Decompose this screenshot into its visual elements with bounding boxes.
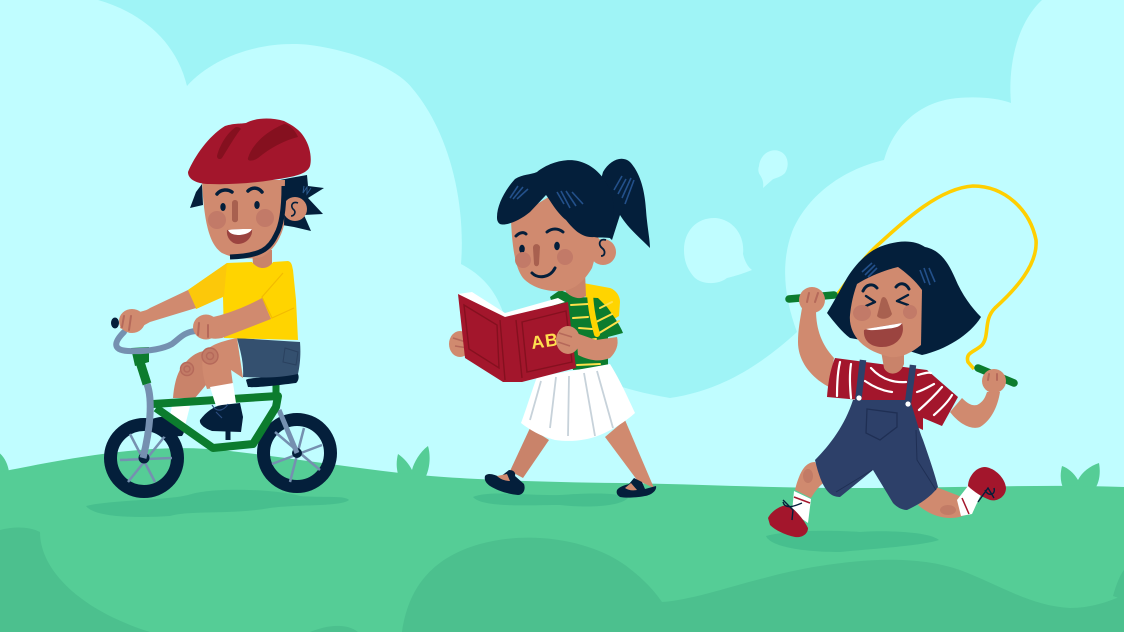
sleeve crease bbox=[262, 273, 294, 318]
shoe lace bbox=[212, 404, 228, 418]
eyes bbox=[519, 242, 560, 253]
shadow: jumper bbox=[766, 531, 939, 552]
book title: ABC bbox=[530, 327, 574, 353]
straps bbox=[858, 360, 913, 403]
sock stripes bbox=[794, 497, 810, 503]
hair highlights bbox=[510, 176, 634, 208]
front sock stripe bbox=[962, 498, 969, 514]
bike hubs bbox=[138, 448, 302, 464]
teeth bbox=[866, 323, 902, 330]
cheeks bbox=[208, 209, 274, 229]
brows bbox=[863, 284, 909, 291]
overalls bbox=[815, 400, 938, 510]
nose bbox=[877, 297, 892, 319]
cloud: tiny puff bbox=[758, 150, 788, 188]
back foot bbox=[150, 406, 190, 437]
backpack bbox=[583, 283, 620, 330]
face bbox=[850, 267, 922, 357]
book pages bbox=[458, 292, 565, 320]
hair bbox=[827, 241, 981, 355]
back fingers bbox=[122, 316, 131, 330]
hill corner bbox=[1113, 570, 1124, 600]
front leg bbox=[605, 420, 654, 488]
shirt bbox=[550, 290, 623, 370]
grips bbox=[111, 318, 225, 337]
cloud: large right bbox=[670, 0, 1124, 520]
ear detail bbox=[291, 202, 298, 216]
mouth bbox=[227, 229, 252, 244]
knee swirl bbox=[180, 362, 194, 376]
left shoe opening bbox=[497, 474, 510, 481]
front shoe bbox=[968, 467, 1006, 500]
front hand bbox=[193, 314, 219, 340]
neck bbox=[252, 250, 272, 269]
front leg bbox=[918, 487, 965, 518]
face bbox=[202, 180, 285, 258]
back leg bbox=[510, 428, 549, 478]
textured sleeve bbox=[188, 263, 227, 309]
pocket bbox=[866, 409, 897, 440]
shadow: bike bbox=[86, 490, 349, 517]
front sock bbox=[210, 383, 236, 406]
bike spokes bbox=[120, 428, 322, 482]
ear bbox=[590, 239, 616, 265]
book cover bbox=[458, 294, 576, 382]
right fingers bbox=[558, 333, 572, 346]
right hand bbox=[982, 369, 1006, 393]
character: child skipping bbox=[768, 186, 1036, 537]
brows bbox=[516, 229, 563, 236]
nose bbox=[232, 200, 238, 222]
teeth bbox=[228, 229, 252, 235]
face bbox=[511, 190, 600, 291]
front laces bbox=[978, 488, 994, 502]
shorts pocket bbox=[283, 348, 298, 365]
front leg thigh bbox=[202, 338, 243, 389]
scrape bbox=[940, 505, 956, 515]
knee swirl front bbox=[202, 348, 218, 364]
left shoe bbox=[485, 470, 525, 495]
brows bbox=[217, 188, 262, 194]
t-shirt stripes bbox=[837, 362, 952, 415]
ear detail bbox=[600, 240, 606, 256]
back arm bbox=[120, 290, 196, 333]
skirt bbox=[521, 364, 635, 441]
backpack strap bbox=[590, 289, 597, 334]
rear fork bbox=[279, 410, 297, 453]
smile bbox=[532, 268, 555, 277]
seat bbox=[246, 372, 299, 387]
cheeks bbox=[853, 305, 917, 321]
back hand bbox=[119, 309, 145, 333]
grass tufts bbox=[0, 446, 1100, 490]
hair highlight bbox=[303, 186, 311, 194]
helmet vents bbox=[217, 124, 298, 161]
right arm bbox=[950, 392, 1000, 428]
hair bbox=[190, 175, 324, 231]
left fingers bbox=[807, 293, 818, 302]
shadow: reader bbox=[473, 493, 628, 507]
t-shirt bbox=[827, 358, 958, 430]
ground bbox=[0, 446, 1124, 632]
mouth bbox=[864, 323, 903, 347]
seat post bbox=[272, 380, 280, 400]
right arm bbox=[576, 333, 618, 360]
front sock bbox=[957, 486, 982, 516]
stem bbox=[131, 347, 149, 366]
helmet bbox=[188, 119, 311, 184]
buttons bbox=[856, 395, 911, 407]
back leg bbox=[173, 351, 222, 398]
fork bbox=[143, 384, 150, 458]
cheeks bbox=[515, 249, 573, 268]
shorts bbox=[237, 338, 300, 378]
left rope handle bbox=[789, 295, 834, 299]
right shoe bbox=[617, 478, 656, 498]
cloud: large left bbox=[0, 0, 720, 520]
skirt pleats bbox=[530, 371, 613, 436]
eyes bbox=[220, 201, 260, 211]
left hand bbox=[449, 331, 471, 357]
bike wheels bbox=[110, 420, 330, 492]
left fingers bbox=[453, 338, 468, 348]
left hand bbox=[799, 287, 825, 313]
character: boy on bike bbox=[110, 119, 330, 491]
ponytail bbox=[590, 159, 650, 248]
character: girl reading bbox=[449, 159, 656, 498]
shirt bbox=[188, 261, 298, 340]
ear bbox=[283, 197, 307, 221]
back laces bbox=[783, 500, 802, 520]
hair highlights bbox=[862, 263, 935, 285]
pedal bbox=[226, 430, 230, 440]
overalls seams bbox=[836, 430, 936, 492]
ground shadows bbox=[86, 490, 939, 552]
front shoe bbox=[200, 403, 243, 432]
bike frame bbox=[153, 396, 278, 448]
cloud: small puff bbox=[684, 218, 752, 283]
front fingers bbox=[198, 323, 208, 337]
neck bbox=[880, 345, 904, 374]
right rope handle bbox=[978, 368, 1014, 383]
back leg bbox=[795, 462, 825, 498]
squeezed eyes bbox=[866, 295, 908, 306]
neck bbox=[560, 272, 586, 298]
knee mark bbox=[803, 469, 813, 483]
back sock bbox=[792, 491, 811, 523]
shirt stripes bbox=[571, 302, 619, 365]
back shoe bbox=[768, 505, 808, 537]
grass field bbox=[0, 448, 1124, 632]
nose bbox=[533, 244, 540, 266]
skipping rope bbox=[836, 186, 1036, 369]
handlebar bbox=[116, 331, 196, 351]
right fingers bbox=[988, 374, 997, 380]
darker hills bbox=[0, 528, 1124, 632]
right shoe opening bbox=[625, 483, 637, 490]
helmet strap bbox=[230, 186, 284, 257]
front arm bbox=[204, 298, 271, 339]
right hand bbox=[556, 326, 580, 354]
hair bbox=[497, 160, 614, 238]
left arm bbox=[798, 308, 834, 387]
book detail bbox=[464, 305, 572, 380]
steering column bbox=[140, 362, 147, 384]
